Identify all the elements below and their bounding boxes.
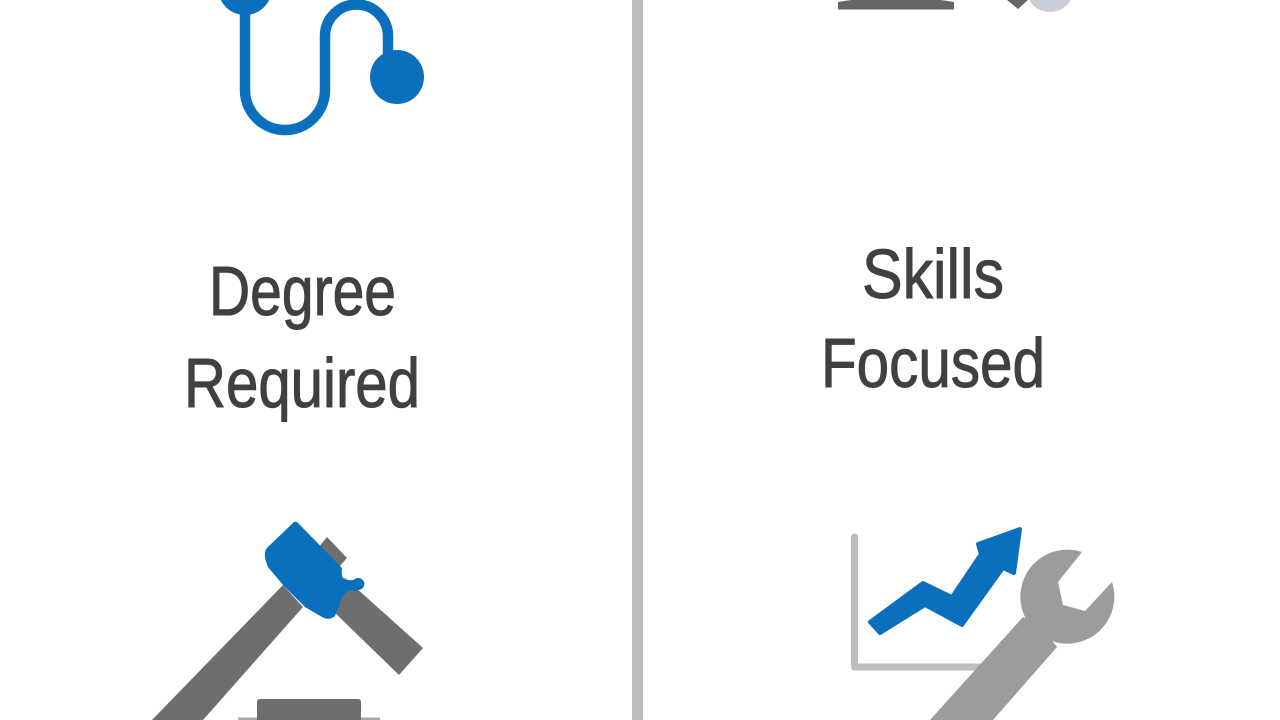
wrench [930, 550, 1114, 720]
panel: degree required [152, 0, 424, 720]
chart axes [854, 537, 985, 667]
heading: Skills Focused: Focused [821, 324, 1045, 402]
heading: Degree Required: Degree [209, 252, 396, 330]
growth arrow [870, 529, 1020, 633]
icon: cropped base and tool [838, 0, 1074, 12]
icon: gavel [152, 522, 423, 720]
divider [632, 0, 643, 720]
panel: skills focused [821, 0, 1114, 720]
icon: growth chart and wrench [854, 529, 1114, 720]
heading: Skills Focused: Skills [862, 235, 1004, 313]
heading: Degree Required: Required [184, 344, 420, 422]
heading: Skills Focused [821, 235, 1045, 402]
icon: stethoscope [218, 0, 424, 130]
heading: Degree Required [184, 252, 420, 422]
